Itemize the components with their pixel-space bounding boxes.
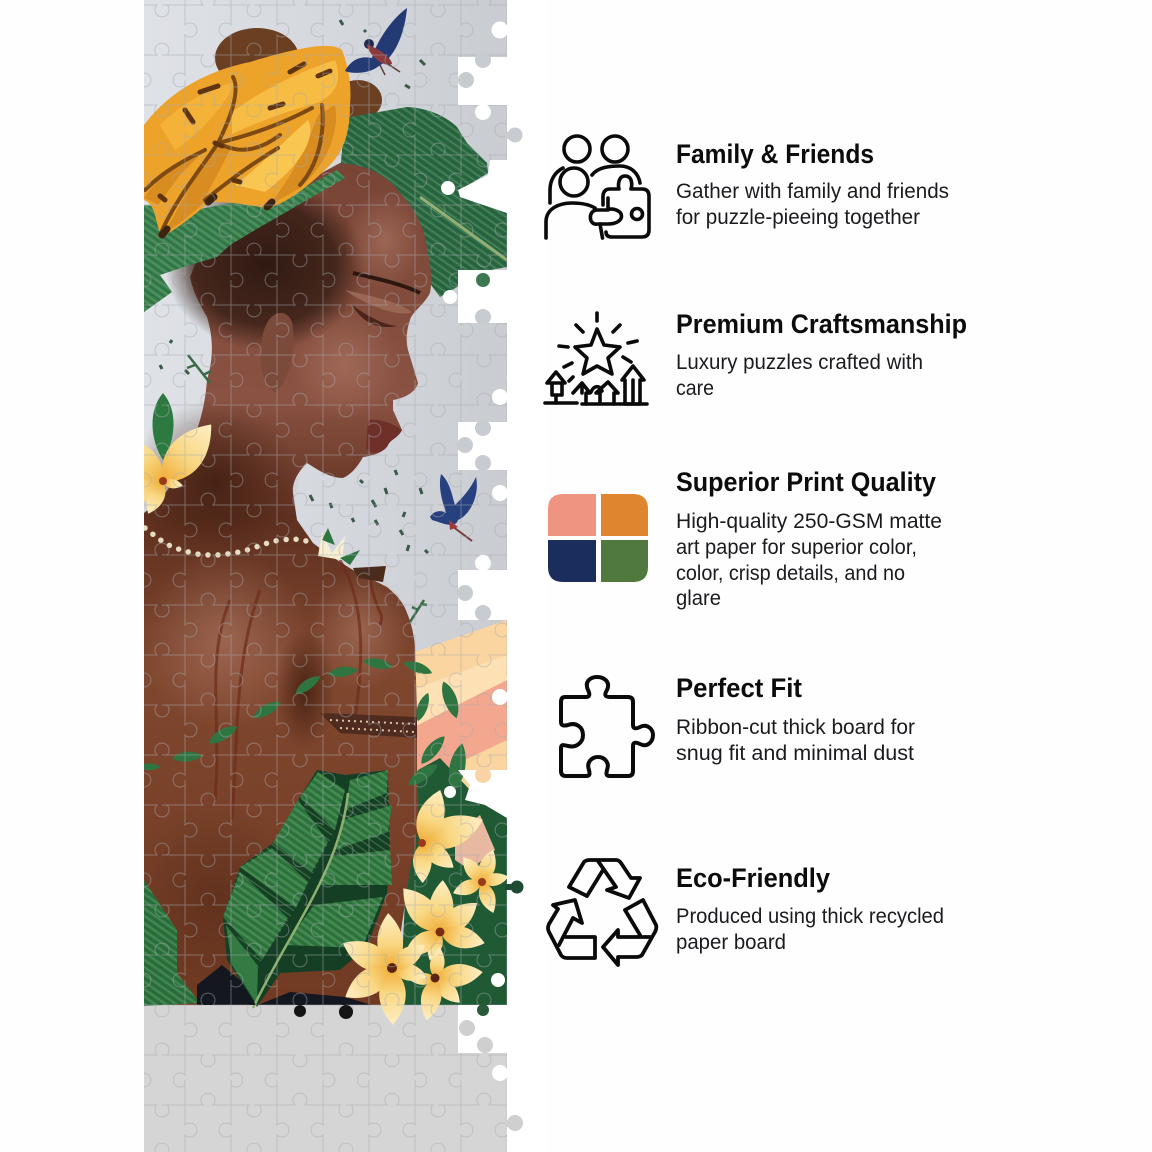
- arm band: [320, 713, 417, 738]
- brown hair bun: [215, 28, 382, 120]
- midrib: [253, 793, 348, 1008]
- flower 5: [410, 946, 484, 1022]
- leaflets: [223, 770, 392, 1005]
- body text: Produced using thick recycled: [676, 904, 944, 928]
- banana spots: [160, 64, 330, 200]
- body text: [676, 350, 923, 400]
- water rivulets: [215, 560, 382, 820]
- spine shadow: [280, 640, 330, 740]
- eyelid: [352, 305, 397, 327]
- bird middle: [430, 474, 477, 541]
- heading: Perfect Fit: [676, 673, 802, 703]
- feature: Family & Friends: [546, 136, 949, 238]
- flower left: [144, 393, 212, 514]
- peach stripes: [412, 620, 507, 790]
- heading: Family & Friends: [676, 139, 874, 169]
- icon: colour swatches: [548, 494, 648, 582]
- artwork grey background: [144, 0, 507, 949]
- lips: [366, 420, 402, 452]
- body text: [676, 179, 949, 229]
- banana dark grooves: [145, 77, 323, 235]
- body text: for puzzle-pieeing together: [676, 205, 920, 229]
- heading: Premium Craftsmanship: [676, 309, 967, 339]
- pink patches in foliage: [455, 815, 495, 870]
- back highlight: [160, 568, 290, 708]
- eyebrow: [353, 273, 420, 293]
- icon: family with puzzle piece: [546, 136, 649, 238]
- icon: recycle arrows: [548, 860, 656, 965]
- flower 3: [393, 879, 487, 963]
- forehead highlight: [354, 203, 414, 276]
- body text: paper board: [676, 930, 786, 954]
- left banana leaf: [144, 170, 345, 312]
- floating leaves: [140, 656, 469, 792]
- banana highlights: [232, 60, 338, 134]
- leaflet hatching: [223, 770, 392, 966]
- top right banana leaf: [340, 107, 507, 297]
- puzzle piece grid: [144, 0, 507, 1152]
- woman figure: [125, 163, 431, 1005]
- feature: Premium Craftsmanship: [545, 309, 967, 404]
- bananas: [144, 46, 351, 237]
- body text: art paper for superior color,: [676, 535, 917, 559]
- panel: puzzle artwork: [109, 0, 510, 1152]
- body text: Ribbon-cut thick board for: [676, 715, 915, 739]
- leaf specks: [160, 20, 428, 553]
- heading: Eco-Friendly: [676, 863, 830, 893]
- flowers cluster: [337, 786, 510, 1025]
- bird top: [345, 8, 407, 75]
- shoulder flower: [318, 528, 386, 582]
- body text: [676, 509, 942, 610]
- feature: Perfect Fit: [561, 673, 915, 776]
- body text: [676, 715, 915, 765]
- body text: [676, 904, 944, 954]
- shoulder highlight: [322, 581, 398, 676]
- flower 4: [337, 912, 430, 1025]
- left lower leaf: [144, 880, 200, 1006]
- flower 1: [410, 786, 488, 883]
- branch sprig: [187, 355, 427, 622]
- body text: care: [676, 376, 714, 400]
- heading: Superior Print Quality: [676, 467, 936, 497]
- body text: High-quality 250-GSM matte: [676, 509, 942, 533]
- body text: snug fit and minimal dust: [676, 741, 914, 765]
- body text: Gather with family and friends: [676, 179, 949, 203]
- flower 2: [450, 847, 510, 916]
- jagged puzzle edge: [294, 0, 547, 1152]
- necklace: [145, 528, 310, 555]
- body text: glare: [676, 586, 721, 610]
- banana tips: [162, 197, 272, 235]
- feature: Eco-Friendly: [548, 860, 944, 965]
- lower blank grey puzzle area: [144, 1005, 507, 1152]
- icon: puzzle piece: [561, 677, 653, 776]
- icon: star and arrows: [545, 313, 647, 404]
- body text: Luxury puzzles crafted with: [676, 350, 923, 374]
- hair shadow: [167, 196, 361, 346]
- banana shaded sides: [144, 105, 336, 232]
- green foliage behind flowers: [400, 758, 507, 1005]
- ear: [261, 313, 293, 392]
- big lower banana leaf: [223, 770, 392, 1008]
- feature: Superior Print Quality: [548, 467, 942, 610]
- dark base shadow: [197, 965, 372, 1005]
- body text: color, crisp details, and no: [676, 561, 905, 585]
- lower back shadow: [161, 838, 254, 958]
- cheek highlight: [308, 327, 382, 402]
- neck shadow: [144, 406, 296, 540]
